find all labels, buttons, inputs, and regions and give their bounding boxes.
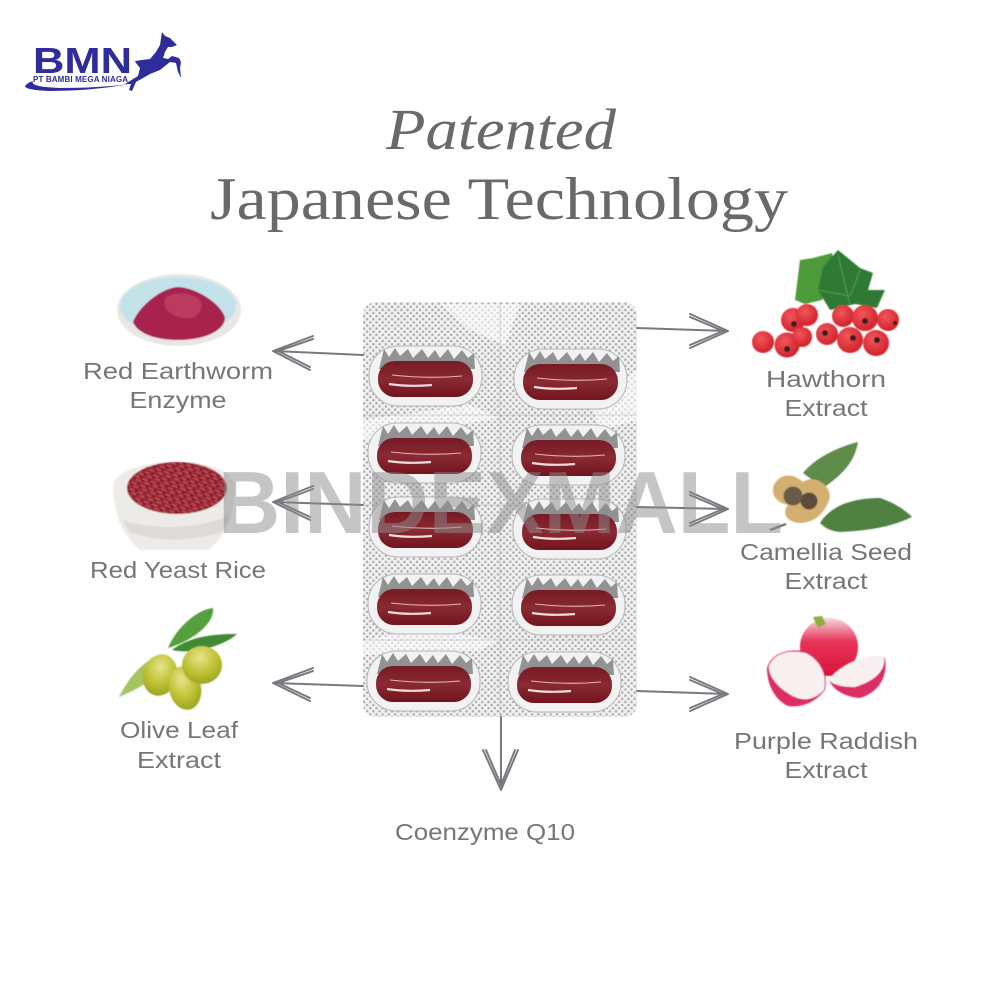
title line: Patented: Patented bbox=[385, 97, 617, 162]
capsule row 2 left bbox=[368, 423, 481, 483]
label: Coenzyme Q10: Coenzyme Q10 bbox=[395, 819, 575, 845]
title bbox=[210, 97, 788, 232]
foil sheet bbox=[363, 302, 637, 717]
leaves bbox=[795, 253, 836, 304]
leaf veins bbox=[818, 255, 860, 305]
left half bbox=[767, 651, 826, 706]
label: Olive Leaf Extract: Extract bbox=[137, 747, 222, 773]
logo swoosh bbox=[25, 81, 130, 91]
husk stem bbox=[770, 524, 786, 530]
leaves bbox=[168, 608, 213, 648]
arrow to red yeast rice bbox=[273, 486, 363, 520]
seed husk bbox=[773, 475, 830, 523]
watermark: BINDEXMALL bbox=[218, 453, 783, 552]
arrow to hawthorn bbox=[637, 314, 728, 348]
radish stem bbox=[813, 616, 826, 628]
icon: olive branch bbox=[119, 608, 237, 713]
capsule row 3 left bbox=[369, 497, 482, 557]
bowl interior bbox=[120, 277, 236, 335]
label: Camellia Seed Extract: Extract bbox=[784, 568, 868, 594]
olives bbox=[138, 650, 182, 700]
logo wordmark: BMN bbox=[33, 40, 132, 81]
label: Olive Leaf Extract bbox=[120, 717, 239, 773]
icon: hawthorn berries and leaves bbox=[752, 250, 899, 358]
icon: red earthworm enzyme powder bowl bbox=[117, 274, 241, 346]
label: Red Earthworm Enzyme: Enzyme bbox=[130, 387, 226, 413]
marble bowl bbox=[113, 462, 235, 550]
label: Purple Raddish Extract: Purple Raddish bbox=[734, 728, 918, 754]
capsule row 5 right bbox=[508, 652, 621, 712]
arrow to coenzyme Q10 bbox=[483, 717, 518, 790]
label: Purple Raddish Extract bbox=[734, 728, 918, 783]
title line: Japanese Technology: Japanese Technology bbox=[210, 166, 788, 232]
capsule row 5 left bbox=[367, 651, 480, 711]
capsule row 1 right bbox=[514, 349, 627, 409]
arrow to purple raddish bbox=[637, 677, 728, 711]
label: Red Earthworm Enzyme bbox=[83, 358, 273, 413]
capsule row 1 left bbox=[369, 346, 482, 406]
blister pack of ten capsules bbox=[363, 302, 637, 717]
label: Purple Raddish Extract: Extract bbox=[784, 757, 868, 783]
berries bbox=[752, 304, 899, 358]
foil perforation lines bbox=[363, 304, 637, 717]
logo tagline: PT BAMBI MEGA NIAGA bbox=[33, 75, 128, 84]
capsule row 2 right bbox=[512, 425, 625, 485]
label: Red Earthworm Enzyme: Red Earthworm bbox=[83, 358, 273, 384]
seeds bbox=[784, 486, 802, 506]
leaves bbox=[803, 442, 858, 488]
icon: camellia seed and leaves bbox=[770, 442, 912, 532]
logo leaping deer bbox=[125, 32, 181, 91]
capsule row 4 left bbox=[368, 574, 481, 634]
powder pile bbox=[133, 287, 225, 340]
red rice bbox=[127, 462, 227, 514]
capsule row 3 right bbox=[513, 499, 626, 559]
label: Camellia Seed Extract: Camellia Seed bbox=[740, 539, 912, 565]
label: Hawthorn Extract bbox=[766, 366, 886, 421]
capsule row 4 right bbox=[512, 575, 625, 635]
logo: BMN PT Bambi Mega Niaga bbox=[25, 32, 181, 91]
arrow to camellia seed bbox=[637, 492, 728, 526]
label: Camellia Seed Extract bbox=[740, 539, 912, 594]
arrow to red earthworm enzyme bbox=[273, 336, 363, 370]
icon: red yeast rice in marble bowl bbox=[113, 462, 235, 550]
whole radish bbox=[800, 618, 858, 676]
bowl bbox=[117, 274, 241, 346]
bowl shading bbox=[122, 515, 230, 540]
label: Olive Leaf Extract: Olive Leaf bbox=[120, 717, 239, 743]
arrow to olive leaf bbox=[273, 668, 363, 701]
foil highlights bbox=[363, 304, 637, 655]
right half bbox=[829, 657, 886, 698]
label: Hawthorn Extract: Extract bbox=[784, 395, 868, 421]
icon: purple radish bbox=[767, 616, 886, 706]
label: Hawthorn Extract: Hawthorn bbox=[766, 366, 886, 392]
label: Red Yeast Rice: Red Yeast Rice bbox=[90, 557, 266, 583]
berry calyxes bbox=[784, 318, 897, 352]
